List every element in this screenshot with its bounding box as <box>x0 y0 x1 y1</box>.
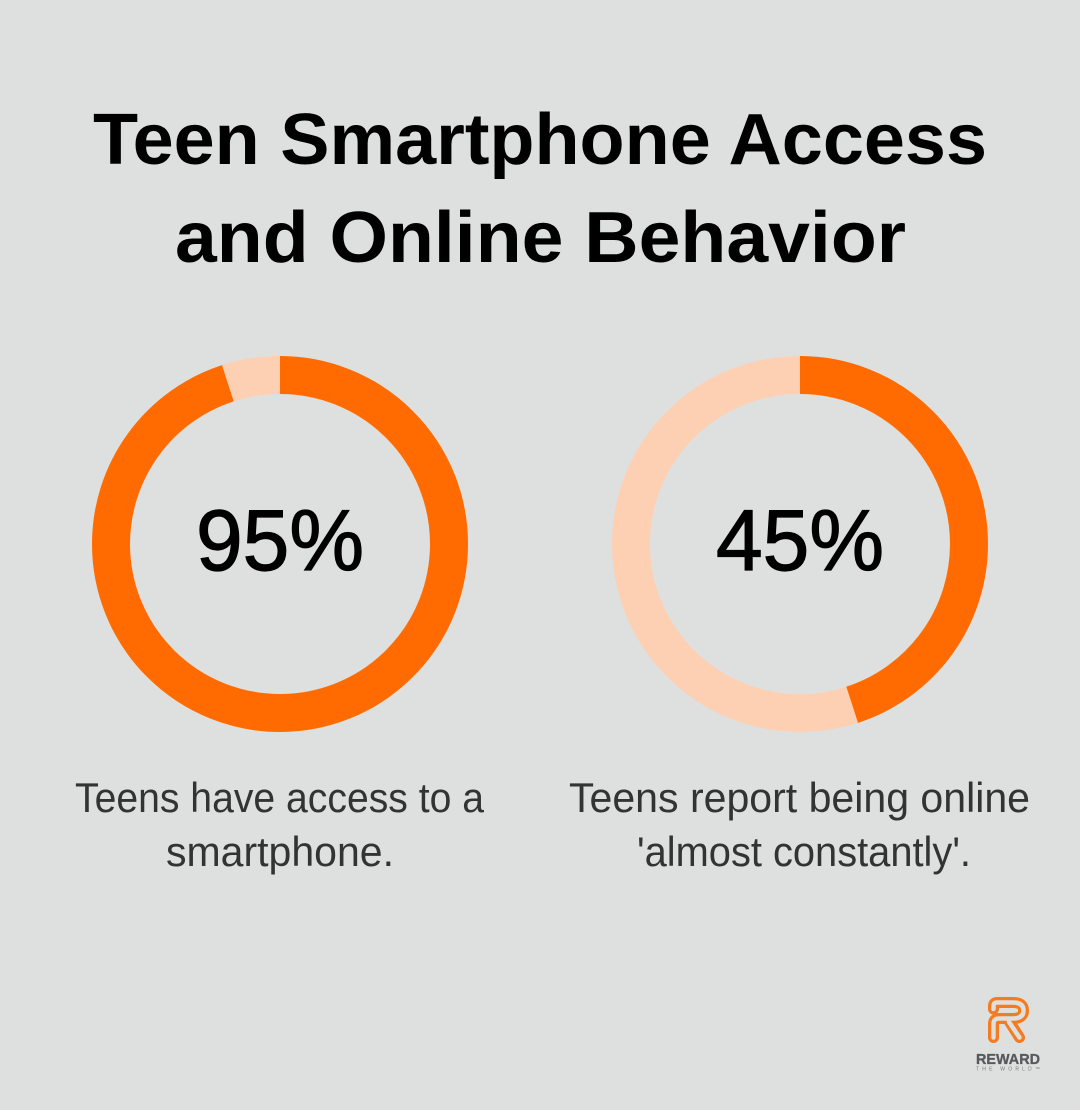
caption: smartphone access <box>75 774 485 875</box>
caption: smartphone access: smartphone. <box>166 828 394 875</box>
value: 95%: 95% <box>196 493 364 589</box>
value: 45%: 45% <box>716 493 884 589</box>
panel: 45 percent online constantly <box>569 375 1030 875</box>
title: and Online Behavior <box>175 198 906 278</box>
tagline: THE WORLD™ <box>976 1066 1040 1072</box>
wordmark: REWARD <box>976 1052 1040 1068</box>
caption: online constantly: 'almost constantly'. <box>637 828 971 875</box>
icon: R mark <box>994 1002 1024 1038</box>
caption: smartphone access: Teens have access to a <box>75 774 485 821</box>
caption: online constantly <box>569 774 1030 875</box>
donut chart: 95% <box>111 375 449 713</box>
panel: 95 percent smartphone access <box>75 375 485 875</box>
title: Teen Smartphone Access <box>93 100 987 180</box>
donut chart: 45% <box>631 375 969 713</box>
logo: Reward the World <box>976 1002 1040 1072</box>
caption: online constantly: Teens report being online <box>569 774 1030 821</box>
title <box>93 100 987 278</box>
